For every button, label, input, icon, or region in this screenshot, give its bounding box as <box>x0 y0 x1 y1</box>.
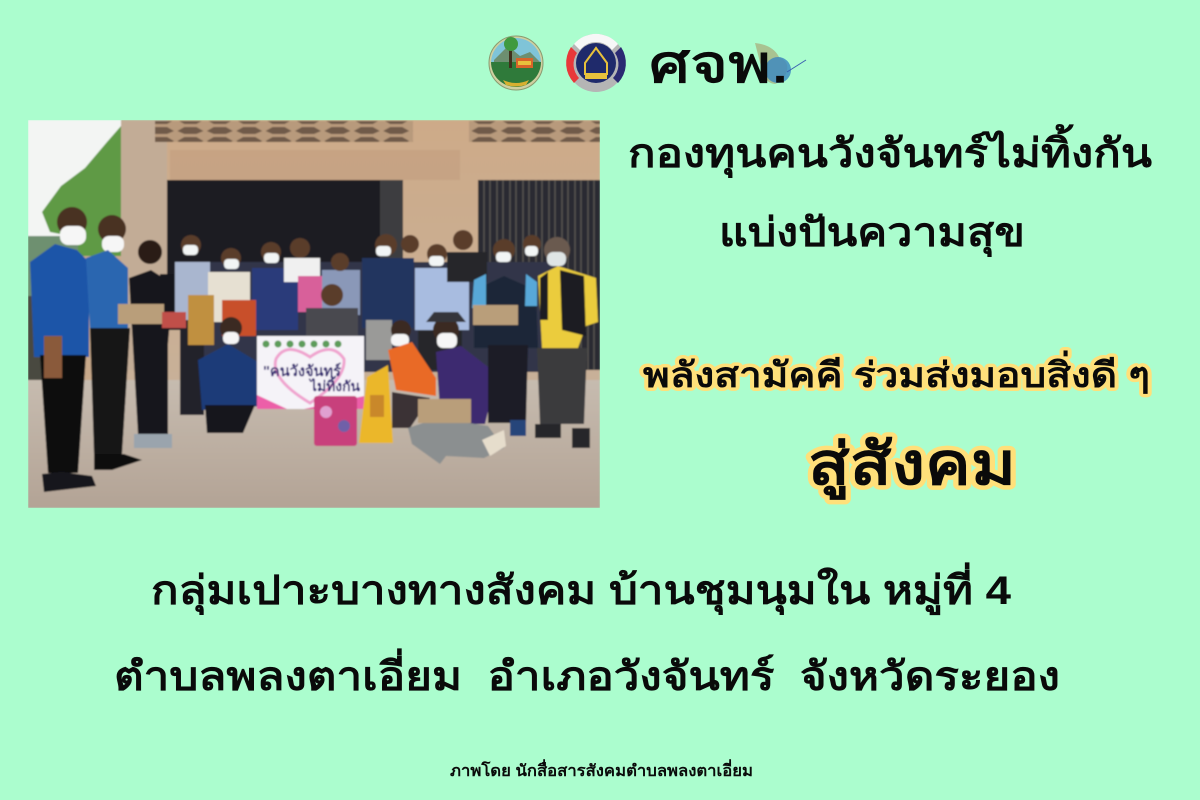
sign: "คนวังจันทร์ <box>263 362 342 380</box>
person: right navy vest <box>472 274 538 436</box>
person: far left <box>30 207 96 492</box>
photo background: sky, tree, wall, floor <box>28 120 600 508</box>
subtitle: แบ่งปันความสุข <box>719 211 1025 258</box>
person: woman in black <box>118 240 186 448</box>
heads back row <box>181 230 541 306</box>
icon: district seal <box>489 36 543 90</box>
gift bags <box>314 365 393 446</box>
photo credit: ภาพโดย นักสื่อสารสังคมตำบลพลงตาเอี่ยม <box>450 759 753 780</box>
highlighted heading: สู่สังคม <box>808 432 1016 500</box>
person: yellow shirt far right <box>535 237 598 448</box>
title: กองทุนคนวังจันทร์ไม่ทิ้งกัน <box>628 124 1152 179</box>
person: second left <box>86 215 142 470</box>
icon: ministry emblem <box>566 34 626 92</box>
people group <box>30 207 598 492</box>
highlighted slogan: พลังสามัคคี ร่วมส่งมอบสิ่งดี ๆ <box>643 350 1150 395</box>
target group line: กลุ่มเปาะบางทางสังคม บ้านชุมนุมใน หมู่ที่ 4 <box>151 562 1012 616</box>
photo <box>28 120 600 508</box>
logo row <box>489 34 806 94</box>
logo wordmark: ศจพ. <box>649 36 789 94</box>
person: orange shirt kneeling <box>388 320 436 428</box>
sign: ไม่ทิ้งกัน <box>308 375 360 394</box>
sign <box>257 336 364 409</box>
person: purple vest kneeling <box>408 312 506 464</box>
location line: ตำบลพลงตาเอี่ยม อำเภอวังจันทร์ จังหวัดระยอง <box>114 648 1060 699</box>
person: kneeling dark blue <box>198 317 262 433</box>
